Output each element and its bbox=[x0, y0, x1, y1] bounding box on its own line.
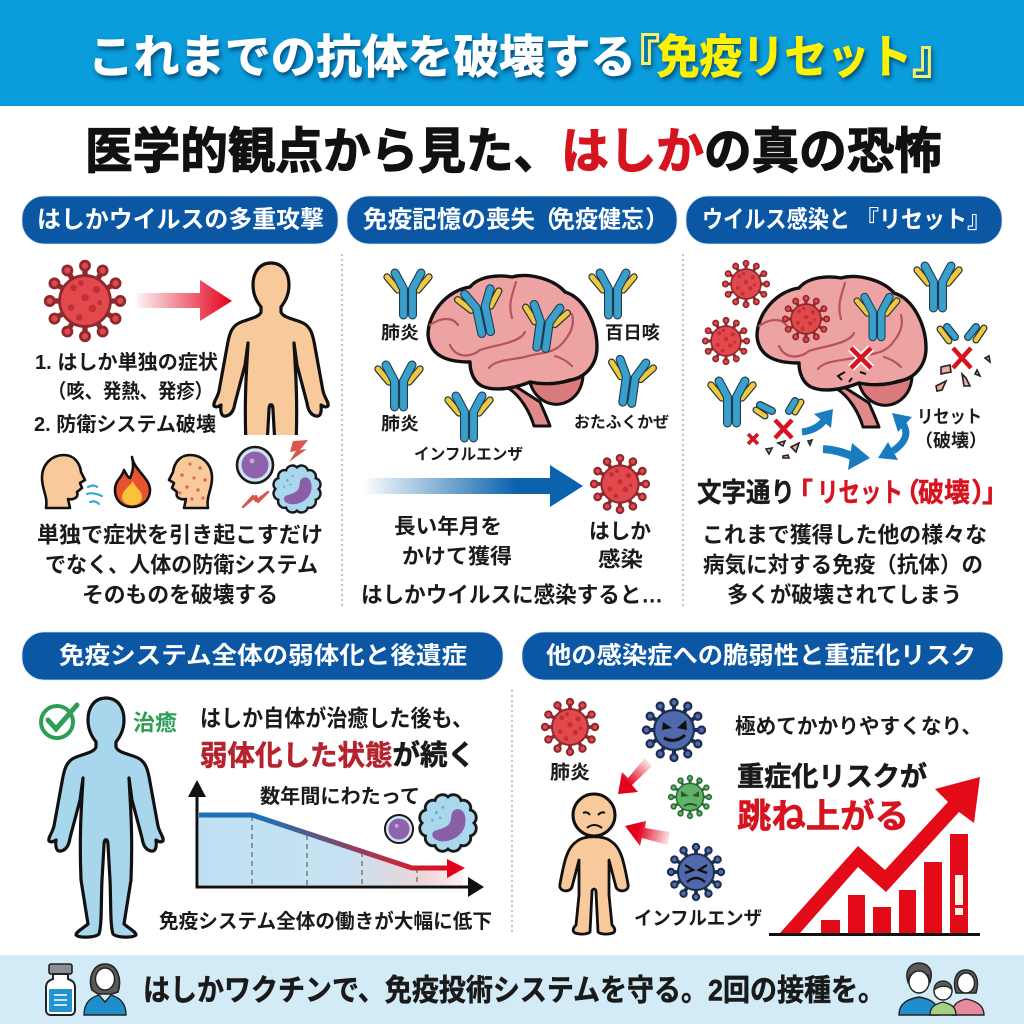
symptom list: 1. はしか単独の症状 bbox=[35, 351, 218, 374]
icon: blue human body bbox=[49, 698, 163, 937]
symptom list: 2. 防衛システム破壊 bbox=[34, 413, 216, 436]
antibodies with disease labels: 肺炎 bbox=[381, 414, 419, 434]
key phrase: 文字通り bbox=[697, 478, 795, 508]
header band bbox=[0, 0, 1024, 106]
icon: pneumonia virus bbox=[542, 699, 598, 755]
timeline labels: かけて獲得 bbox=[402, 546, 512, 568]
panel: vulnerability to other infections bbox=[522, 632, 1003, 936]
chart caption: 免疫システム全体の働きが大幅に低下 bbox=[159, 909, 492, 933]
chart: immune decline bbox=[188, 780, 484, 897]
explanation text bbox=[702, 522, 987, 608]
icons: antibodies bbox=[711, 266, 959, 423]
arrows: reset cycle bbox=[802, 409, 912, 470]
icon: destroyed antibody right bbox=[936, 327, 990, 391]
explanation text: これまで獲得した他の様々な bbox=[702, 522, 987, 548]
icon: human body bbox=[212, 261, 330, 435]
icon: vaccine vial bbox=[46, 964, 75, 1015]
timeline labels: はしか bbox=[589, 520, 651, 544]
timeline labels: 感染 bbox=[598, 548, 643, 572]
statement: 弱体化した状態が続く bbox=[200, 738, 475, 770]
heading pill bbox=[522, 632, 1003, 680]
label: reset: リセット bbox=[917, 407, 982, 427]
icon: destroyed antibody left bbox=[748, 401, 812, 458]
antibodies with disease labels bbox=[378, 273, 669, 464]
icon: brain with antibodies bbox=[428, 275, 597, 426]
label: cured: 治癒 bbox=[133, 710, 177, 736]
title: 』 bbox=[912, 31, 958, 83]
heading pill: ウイルス感染と bbox=[702, 206, 850, 234]
explanation text bbox=[37, 522, 323, 608]
label: influenza: インフルエンザ bbox=[634, 908, 762, 930]
label: pneumonia: 肺炎 bbox=[550, 762, 590, 784]
footer band bbox=[0, 955, 1024, 1024]
arrow: over the years bbox=[362, 465, 583, 507]
explanation text: 多くが破壊されてしまう bbox=[727, 582, 962, 608]
explanation text: 病気に対する免疫（抗体）の bbox=[703, 552, 983, 578]
label: reset bbox=[915, 407, 987, 451]
statement: 極めてかかりやすくなり、 bbox=[735, 716, 982, 738]
heading pill: ） bbox=[645, 206, 669, 234]
icon: sick person bbox=[560, 794, 628, 934]
icons: weakened cells bbox=[385, 795, 476, 851]
arrows: infections toward person bbox=[618, 758, 670, 846]
heading pill bbox=[22, 196, 338, 244]
key phrase: 「 bbox=[786, 478, 813, 508]
timeline labels bbox=[394, 516, 651, 572]
icon: family bbox=[899, 963, 984, 1015]
symptom list bbox=[34, 351, 218, 436]
statement: はしか自体が治癒した後も、 bbox=[200, 705, 473, 731]
icon: recovered check bbox=[41, 705, 77, 738]
icon: green virus bbox=[669, 776, 711, 818]
icon: measles virus bbox=[45, 261, 125, 341]
icon: woman bbox=[84, 964, 126, 1015]
heading pill bbox=[686, 196, 1002, 244]
label: over years: 数年間にわたって bbox=[260, 785, 420, 808]
key phrase: リセット bbox=[817, 478, 903, 508]
panel: weakened immune system bbox=[22, 632, 503, 937]
lead-in text: はしかウイルスに感染すると… bbox=[361, 582, 663, 608]
icon: angry blue virus bbox=[668, 844, 724, 900]
panel: multiple attack bbox=[22, 196, 338, 608]
explanation text: でなく、人体の防衛システム bbox=[45, 552, 318, 578]
title bbox=[88, 31, 958, 83]
heading pill: （ bbox=[533, 206, 557, 234]
heading pill: 他の感染症への脆弱性と重症化リスク bbox=[546, 642, 976, 670]
statement bbox=[200, 705, 475, 770]
key phrase: （ bbox=[893, 478, 920, 508]
icon: evil blue virus bbox=[643, 699, 705, 761]
subtitle: 医学的観点から見た、はしかの真の恐怖 bbox=[85, 125, 942, 179]
heading pill: 免疫システム全体の弱体化と後遺症 bbox=[59, 642, 467, 670]
title: これまでの抗体を破壊する bbox=[88, 31, 636, 83]
heading pill: 免疫健忘 bbox=[552, 206, 644, 234]
heading pill: 』 bbox=[967, 206, 991, 234]
icon: rash bbox=[169, 455, 212, 508]
risk headline: 重症化リスクが bbox=[737, 761, 927, 792]
heading pill: はしかウイルスの多重攻撃 bbox=[37, 206, 324, 234]
arrow: infection bbox=[137, 280, 232, 321]
timeline labels: 長い年月を bbox=[394, 516, 502, 538]
label: reset: （破壊） bbox=[915, 431, 987, 451]
key phrase: 」 bbox=[982, 478, 1009, 508]
title: 『 bbox=[614, 31, 660, 83]
key phrase: ） bbox=[971, 478, 998, 508]
icon: measles virus bbox=[591, 455, 649, 513]
footer message: はしかワクチンで、免疫投術システムを守る。2回の接種を。 bbox=[143, 974, 885, 1008]
icon: cough bbox=[42, 455, 102, 508]
symptom list: （咳、発熱、発疹） bbox=[48, 380, 213, 403]
icon: immune cells under attack bbox=[237, 440, 320, 512]
heading pill: 『 bbox=[855, 206, 879, 234]
icon: infected brain bbox=[757, 276, 926, 427]
antibodies with disease labels: 百日咳 bbox=[605, 323, 660, 343]
icon: fever flame bbox=[115, 457, 150, 507]
key phrase: 破壊 bbox=[918, 478, 970, 508]
panel: loss of immune memory bbox=[347, 196, 677, 608]
title: 免疫リセット bbox=[657, 31, 912, 83]
icons: surrounding viruses bbox=[703, 261, 769, 364]
panel: virus infection and reset bbox=[686, 196, 1009, 608]
risk headline bbox=[737, 761, 927, 836]
heading pill bbox=[22, 632, 503, 680]
heading pill: 免疫記憶の喪失 bbox=[363, 206, 535, 234]
antibodies with disease labels: おたふくかぜ bbox=[574, 414, 669, 432]
key phrase bbox=[697, 478, 1009, 508]
chart: rising risk bbox=[769, 777, 980, 936]
antibodies with disease labels: インフルエンザ bbox=[414, 446, 523, 464]
antibodies with disease labels: 肺炎 bbox=[381, 323, 419, 343]
explanation text: 単独で症状を引き起こすだけ bbox=[37, 522, 323, 548]
explanation text: そのものを破壊する bbox=[82, 582, 278, 608]
risk headline: 跳ね上がる bbox=[737, 797, 909, 836]
heading pill: リセット bbox=[879, 206, 967, 234]
heading pill bbox=[347, 196, 677, 244]
